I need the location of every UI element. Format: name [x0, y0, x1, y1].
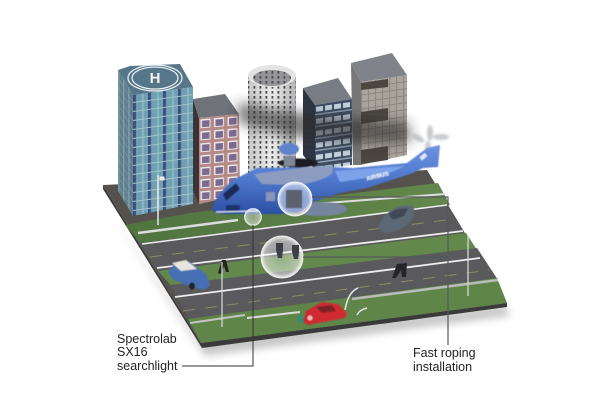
rotor blur	[238, 102, 412, 143]
boom highlight	[335, 166, 405, 182]
searchlight magnifier bubble	[244, 208, 262, 226]
tail rotor	[410, 125, 449, 153]
bottom grass	[188, 278, 507, 343]
lamp posts	[222, 235, 468, 327]
roping figures bubble	[261, 236, 303, 278]
people on road	[218, 260, 407, 323]
leader line: fast roping	[303, 197, 448, 345]
label: fast roping: Fast roping	[413, 346, 476, 360]
label: searchlight: SX16	[117, 345, 148, 359]
helipad marking	[128, 65, 182, 91]
platform shadow	[112, 215, 510, 356]
sponson	[293, 202, 347, 216]
top grass strip	[125, 183, 450, 245]
car: red hatchback	[303, 302, 347, 325]
cockpit window	[223, 183, 240, 201]
label: searchlight: Spectrolab	[117, 332, 177, 346]
label: fast roping: installation	[413, 360, 472, 374]
upper road	[140, 205, 466, 272]
radar dome	[279, 143, 299, 155]
wreckage debris	[345, 288, 367, 315]
engine housing	[254, 165, 333, 185]
building: red brick	[193, 94, 240, 204]
helipad marking: H	[150, 70, 160, 87]
fast roping magnifier bubble	[278, 182, 312, 216]
car: grey sedan	[378, 206, 414, 233]
tail marking	[419, 153, 427, 160]
fuselage	[212, 145, 440, 214]
side window	[226, 205, 240, 211]
street lamp	[158, 175, 164, 225]
label: searchlight: searchlight	[117, 359, 178, 373]
leader line: searchlight	[182, 225, 253, 366]
helicopter	[212, 125, 449, 216]
road markings	[138, 194, 498, 323]
car: blue suv	[168, 260, 210, 290]
building: slate office	[303, 78, 352, 170]
building: blue helipad tower	[118, 64, 193, 216]
building: tan glass office	[351, 53, 407, 165]
platform base	[103, 170, 507, 348]
door	[266, 192, 275, 201]
middle grass median	[158, 233, 477, 290]
belly stripe	[216, 211, 258, 212]
building: white cylinder tower	[248, 65, 296, 180]
rotor head	[278, 158, 318, 168]
lower road	[170, 248, 498, 321]
airbus label: AIRBUS	[366, 171, 390, 183]
